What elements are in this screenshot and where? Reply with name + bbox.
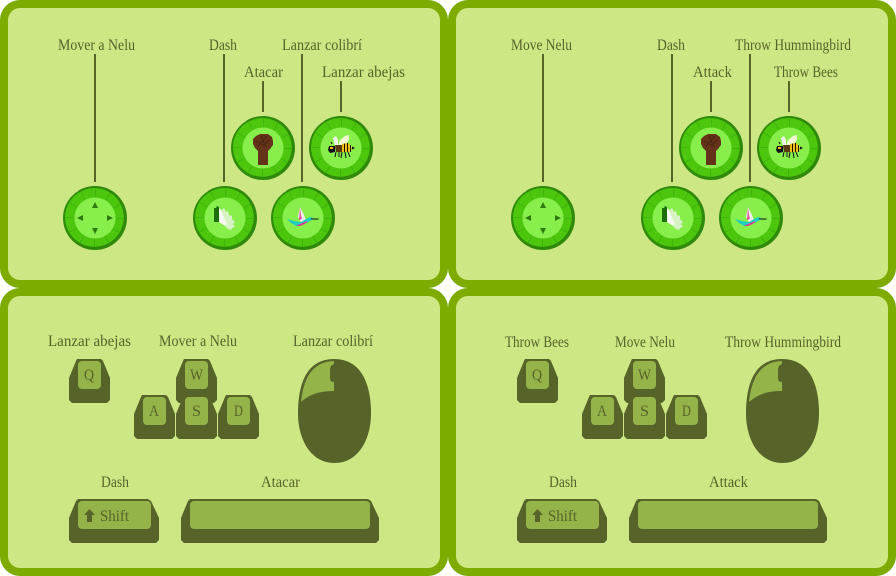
key D: D — [234, 403, 243, 420]
label: Dash: Dash — [549, 474, 577, 491]
key S — [624, 395, 665, 439]
key D — [218, 395, 259, 439]
key D: D — [682, 403, 691, 420]
panel: gamepad Spanish — [0, 0, 448, 288]
label: Dash: Dash — [657, 37, 685, 54]
icon: move joystick — [511, 186, 575, 250]
label: Dash: Dash — [101, 474, 129, 491]
leader lines — [95, 54, 341, 182]
key A: A — [597, 403, 607, 420]
key A: A — [149, 403, 159, 420]
key W: W — [190, 367, 204, 384]
label: Throw Bees: Throw Bees — [774, 64, 838, 81]
key W — [624, 359, 665, 403]
icon: bee button — [757, 116, 821, 180]
key S: S — [192, 403, 201, 420]
key Shift — [69, 499, 159, 543]
icon: hummingbird button — [719, 186, 783, 250]
key Q — [517, 359, 558, 403]
label: Move Nelu: Move Nelu — [615, 334, 675, 351]
label: Move Nelu: Move Nelu — [511, 37, 572, 54]
label: Throw Hummingbird: Throw Hummingbird — [725, 334, 841, 351]
label: Mover a Nelu: Mover a Nelu — [159, 333, 237, 350]
label: Lanzar colibrí: Lanzar colibrí — [293, 333, 373, 350]
label: Atacar: Atacar — [244, 64, 284, 81]
leader lines — [543, 54, 789, 182]
label: Attack: Attack — [709, 474, 748, 491]
key A — [134, 395, 175, 439]
panel: keyboard English — [448, 288, 896, 576]
key Space — [629, 499, 827, 543]
label: Lanzar abejas: Lanzar abejas — [322, 64, 405, 81]
label: Lanzar colibrí: Lanzar colibrí — [282, 37, 362, 54]
label: Lanzar abejas: Lanzar abejas — [48, 333, 131, 350]
label: Atacar: Atacar — [261, 474, 301, 491]
key Shift — [517, 499, 607, 543]
icon: fist button — [679, 116, 743, 180]
icon: fist button — [231, 116, 295, 180]
key Q: Q — [84, 367, 94, 384]
key D — [666, 395, 707, 439]
label: Attack: Attack — [693, 64, 732, 81]
panel: gamepad English — [448, 0, 896, 288]
label: Dash: Dash — [209, 37, 237, 54]
key W: W — [638, 367, 652, 384]
icon: move joystick — [63, 186, 127, 250]
label: Throw Bees: Throw Bees — [505, 334, 569, 351]
key S — [176, 395, 217, 439]
key Space — [181, 499, 379, 543]
icon: mouse — [298, 359, 371, 463]
icon: bee button — [309, 116, 373, 180]
key Shift: Shift — [100, 508, 130, 525]
key Q: Q — [532, 367, 542, 384]
key Q — [69, 359, 110, 403]
key A — [582, 395, 623, 439]
key S: S — [640, 403, 649, 420]
icon: dash button — [641, 186, 705, 250]
icon: dash button — [193, 186, 257, 250]
label: Mover a Nelu: Mover a Nelu — [58, 37, 135, 54]
icon: hummingbird button — [271, 186, 335, 250]
key W — [176, 359, 217, 403]
key Shift: Shift — [548, 508, 578, 525]
label: Throw Hummingbird: Throw Hummingbird — [735, 37, 851, 54]
panel: keyboard Spanish — [0, 288, 448, 576]
icon: mouse — [746, 359, 819, 463]
